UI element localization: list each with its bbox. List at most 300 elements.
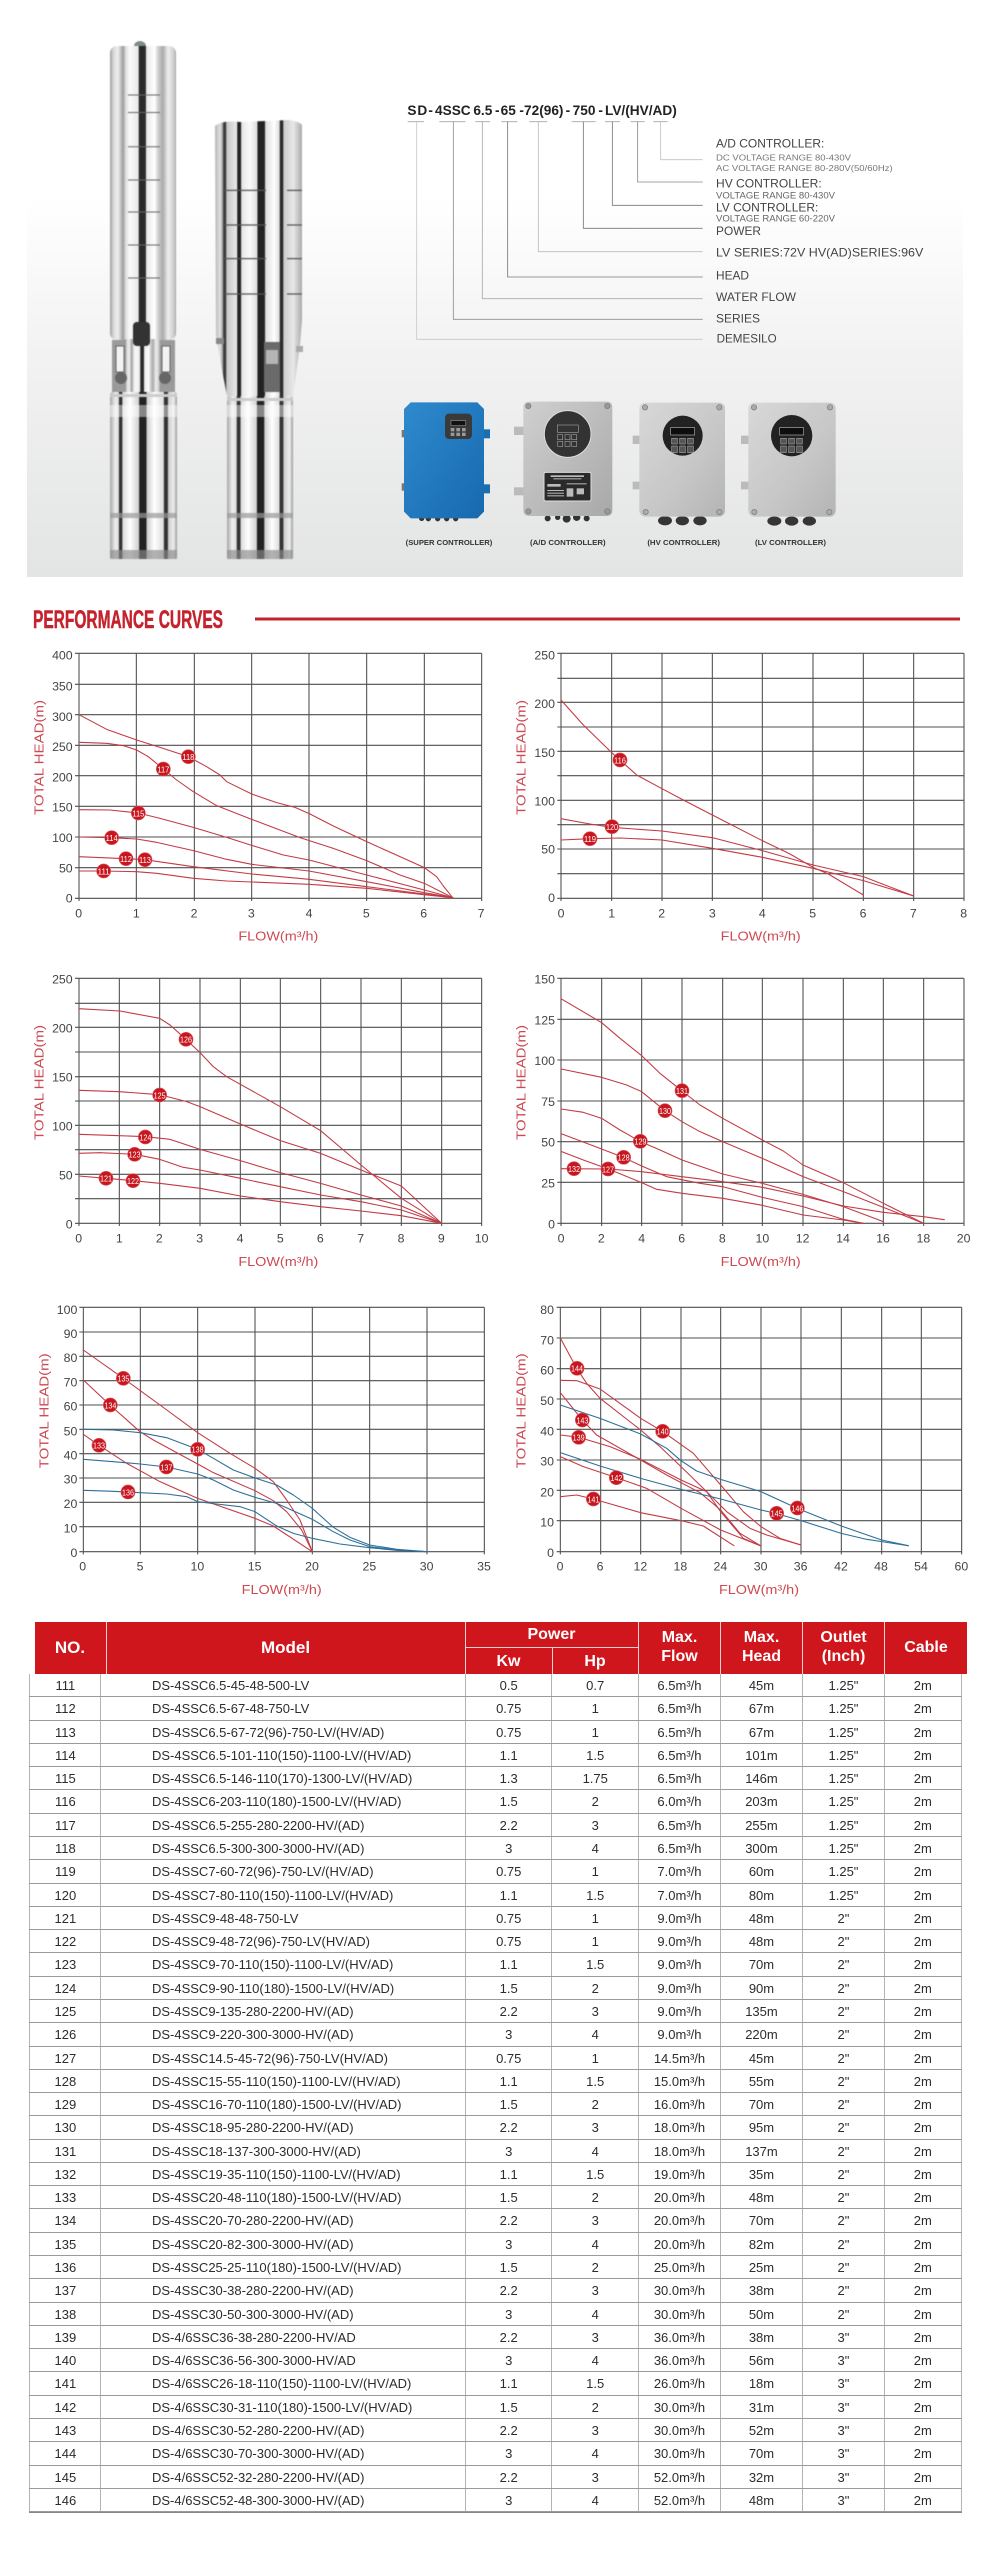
row 131: 137m bbox=[745, 2144, 778, 2159]
row 115: 6.5m³/h bbox=[657, 1771, 702, 1786]
chart: models 116, 119, 120: 8 bbox=[960, 906, 967, 920]
row 143: 2m bbox=[914, 2423, 932, 2438]
chart: models 139-146: 10 bbox=[540, 1516, 554, 1530]
chart: models 121-126: 7 bbox=[357, 1232, 364, 1246]
row 122: 122 bbox=[54, 1934, 76, 1949]
row 132: 35m bbox=[749, 2167, 774, 2182]
chart: models 139-146: 30 bbox=[540, 1455, 554, 1469]
row 136 bbox=[29, 2256, 962, 2279]
row 131: 18.0m³/h bbox=[654, 2144, 705, 2159]
row 135: 82m bbox=[749, 2237, 774, 2252]
model code string: 4SSC bbox=[435, 103, 471, 118]
chart: models 127-132: 127 bbox=[602, 1164, 614, 1174]
row 133 bbox=[29, 2186, 962, 2209]
row 115 bbox=[29, 1767, 962, 1790]
row 129: 2 bbox=[592, 2097, 599, 2112]
row 144: 144 bbox=[54, 2446, 76, 2461]
row 121: 48m bbox=[749, 1911, 774, 1926]
row 128: 2" bbox=[838, 2074, 849, 2089]
chart: models 121-126: 150 bbox=[52, 1071, 73, 1085]
legend labels: WATER FLOW bbox=[716, 290, 797, 304]
model code string: 6.5 bbox=[473, 103, 493, 118]
row 119: 2m bbox=[914, 1864, 932, 1879]
row 115: 2m bbox=[914, 1771, 932, 1786]
row 127: 2" bbox=[838, 2050, 849, 2066]
row 122 bbox=[29, 1930, 962, 1953]
row 112: 1.25" bbox=[828, 1701, 858, 1716]
row 140: 56m bbox=[749, 2353, 774, 2368]
row 141: 1.1 bbox=[500, 2376, 518, 2391]
row 113: 67m bbox=[749, 1725, 774, 1740]
chart: models 111-115, 117, 118: 117 bbox=[157, 764, 169, 774]
row 115: 115 bbox=[55, 1771, 76, 1786]
chart: models 127-132: 150 bbox=[534, 972, 555, 986]
row 111 bbox=[29, 1674, 962, 1697]
chart: models 139-146: 54 bbox=[914, 1560, 928, 1574]
chart: models 127-132: 130 bbox=[659, 1106, 671, 1116]
row 120: 2m bbox=[914, 1888, 932, 1903]
legend labels: VOLTAGE RANGE 60-220V bbox=[716, 214, 835, 224]
row 137: 2" bbox=[838, 2283, 849, 2298]
model code string: 65 bbox=[501, 103, 516, 118]
row 129: 2m bbox=[914, 2097, 932, 2112]
row 130: 2.2 bbox=[500, 2120, 518, 2135]
chart: models 139-146: 60 bbox=[954, 1560, 968, 1574]
row 120: DS-4SSC7-80-110(150)-1100-LV/(HV/AD) bbox=[152, 1888, 393, 1903]
row 112: 1 bbox=[592, 1701, 599, 1716]
row 132: DS-4SSC19-35-110(150)-1100-LV/(HV/AD) bbox=[152, 2167, 401, 2182]
row 121: 2m bbox=[914, 1911, 932, 1926]
chart: models 139-146: 139 bbox=[573, 1433, 585, 1443]
row 124: 2m bbox=[914, 1981, 932, 1996]
row 138: DS-4SSC30-50-300-3000-HV/(AD) bbox=[152, 2307, 354, 2322]
row 123: 9.0m³/h bbox=[657, 1957, 702, 1972]
chart: models 139-146: TOTAL HEAD(m) bbox=[514, 1353, 529, 1468]
row 135: 20.0m³/h bbox=[654, 2237, 705, 2252]
chart: models 116, 119, 120: 3 bbox=[709, 906, 716, 920]
row 124 bbox=[29, 1977, 962, 2000]
chart: models 127-132: 25 bbox=[541, 1176, 555, 1190]
chart: models 116, 119, 120: 100 bbox=[534, 794, 555, 808]
row 118: 3 bbox=[505, 1841, 512, 1856]
chart: models 139-146: 142 bbox=[610, 1473, 622, 1483]
chart: models 111-115, 117, 118: 115 bbox=[132, 808, 144, 818]
row 123: 1.5 bbox=[586, 1957, 604, 1972]
row 116: 6.0m³/h bbox=[657, 1794, 702, 1809]
row 138: 3 bbox=[505, 2307, 512, 2322]
row 141: 141 bbox=[54, 2376, 76, 2391]
legend labels: AC VOLTAGE RANGE 80-280V(50/60Hz) bbox=[716, 163, 893, 173]
pump 2 bbox=[215, 120, 303, 559]
row 142: 31m bbox=[749, 2400, 774, 2415]
chart: models 139-146: 140 bbox=[657, 1427, 669, 1437]
chart: models 111-115, 117, 118: 300 bbox=[52, 710, 73, 724]
table header bbox=[35, 1622, 967, 1674]
row 141: 26.0m³/h bbox=[654, 2376, 705, 2391]
row 130: 3 bbox=[592, 2120, 599, 2135]
chart: models 121-126: 121 bbox=[100, 1174, 112, 1184]
row 119: DS-4SSC7-60-72(96)-750-LV/(HV/AD) bbox=[152, 1864, 374, 1879]
row 144: 70m bbox=[749, 2446, 774, 2461]
chart: models 139-146: 141 bbox=[587, 1494, 599, 1504]
row 129: DS-4SSC16-70-110(180)-1500-LV/(HV/AD) bbox=[152, 2097, 401, 2112]
row 121 bbox=[29, 1907, 962, 1930]
chart: models 139-146: 20 bbox=[540, 1485, 554, 1499]
row 144: 30.0m³/h bbox=[654, 2446, 705, 2461]
chart: models 133-138: 10 bbox=[64, 1521, 77, 1535]
row 135 bbox=[29, 2233, 962, 2256]
row 122: 2m bbox=[914, 1934, 932, 1949]
chart: models 139-146: 48 bbox=[874, 1560, 888, 1574]
row 132: 1.1 bbox=[500, 2167, 518, 2182]
row 133: 2 bbox=[592, 2190, 599, 2205]
row 121: 1 bbox=[592, 1911, 599, 1926]
row 111: 0.7 bbox=[586, 1678, 604, 1693]
row 122: 48m bbox=[749, 1934, 774, 1949]
chart: models 133-138: 5 bbox=[137, 1560, 144, 1574]
chart: models 121-126: 9 bbox=[438, 1232, 445, 1246]
code underlines and leader lines bbox=[408, 122, 703, 339]
chart: models 127-132: 18 bbox=[916, 1232, 930, 1246]
row 137: 3 bbox=[592, 2283, 599, 2298]
row 139 bbox=[29, 2326, 962, 2349]
row 126: 220m bbox=[745, 2027, 778, 2042]
row 128: 128 bbox=[54, 2074, 76, 2089]
chart: models 111-115, 117, 118: 3 bbox=[248, 906, 255, 920]
row 133: 20.0m³/h bbox=[654, 2190, 705, 2205]
row 119: 1.25" bbox=[828, 1864, 858, 1879]
chart: models 133-138: 35 bbox=[477, 1560, 491, 1574]
controller: super bbox=[402, 402, 490, 521]
section heading: performance curves bbox=[33, 606, 960, 634]
row 126: 2" bbox=[838, 2027, 849, 2042]
row 131 bbox=[29, 2140, 962, 2163]
chart: models 127-132: 129 bbox=[634, 1137, 646, 1147]
row 146: 146 bbox=[54, 2493, 76, 2508]
chart: models 133-138: FLOW(m³/h) bbox=[242, 1582, 322, 1597]
row 125: 125 bbox=[54, 2004, 76, 2019]
chart: models 133-138: 20 bbox=[305, 1560, 319, 1574]
legend labels: A/D CONTROLLER: bbox=[716, 137, 824, 151]
chart: models 133-138: 0 bbox=[79, 1560, 86, 1574]
chart: models 111-115, 117, 118: 0 bbox=[75, 906, 82, 920]
row 115: 1.75 bbox=[583, 1771, 608, 1786]
row 112: DS-4SSC6.5-67-48-750-LV bbox=[152, 1701, 309, 1716]
chart: models 127-132: 12 bbox=[796, 1232, 810, 1246]
chart: models 127-132: 2 bbox=[598, 1232, 605, 1246]
chart: models 133-138: 50 bbox=[64, 1424, 77, 1438]
row 131: 131 bbox=[54, 2144, 76, 2159]
chart: models 127-132: 10 bbox=[755, 1232, 769, 1246]
model code diagram bbox=[407, 103, 924, 345]
row 120: 1.1 bbox=[500, 1888, 518, 1903]
chart: models 116, 119, 120: 250 bbox=[534, 649, 555, 663]
row 114: 114 bbox=[55, 1748, 76, 1763]
row 119: 1 bbox=[592, 1864, 599, 1879]
chart: models 111-115, 117, 118: 200 bbox=[52, 771, 73, 785]
chart: models 121-126: 200 bbox=[52, 1021, 73, 1035]
chart: models 127-132: 14 bbox=[836, 1232, 850, 1246]
chart: models 116, 119, 120: 120 bbox=[606, 822, 618, 832]
row 125: 135m bbox=[745, 2004, 778, 2019]
row 134: DS-4SSC20-70-280-2200-HV/(AD) bbox=[152, 2213, 354, 2228]
row 125: DS-4SSC9-135-280-2200-HV/(AD) bbox=[152, 2004, 354, 2019]
chart: models 116, 119, 120: 6 bbox=[860, 906, 867, 920]
row 137: 2.2 bbox=[500, 2283, 518, 2298]
illustration: two stainless steel pumps bbox=[110, 40, 304, 560]
chart: models 133-138: 25 bbox=[362, 1560, 376, 1574]
row 134: 2" bbox=[838, 2213, 849, 2228]
row 122: 2" bbox=[838, 1934, 849, 1949]
row 116: 116 bbox=[55, 1794, 76, 1809]
row 146: 52.0m³/h bbox=[654, 2493, 705, 2508]
chart: models 133-138: 138 bbox=[192, 1445, 204, 1455]
row 114: DS-4SSC6.5-101-110(150)-1100-LV/(HV/AD) bbox=[152, 1748, 411, 1763]
row 125: 9.0m³/h bbox=[657, 2004, 702, 2019]
row 123: 70m bbox=[749, 1957, 774, 1972]
row 140: 3" bbox=[838, 2353, 849, 2368]
row 145: 32m bbox=[749, 2470, 774, 2485]
chart: models 133-138: 90 bbox=[64, 1327, 77, 1341]
row 142: 3" bbox=[838, 2400, 849, 2415]
row 143: DS-4/6SSC30-52-280-2200-HV/(AD) bbox=[152, 2423, 364, 2438]
row 141: 2m bbox=[914, 2376, 932, 2391]
chart: models 111-115, 117, 118: 350 bbox=[52, 680, 73, 694]
row 140: 4 bbox=[592, 2353, 599, 2368]
row 124: 9.0m³/h bbox=[657, 1981, 702, 1996]
row 141: 3" bbox=[838, 2376, 849, 2391]
chart: models 121-126: 1 bbox=[116, 1232, 123, 1246]
model code string: - bbox=[519, 103, 524, 118]
row 144 bbox=[29, 2442, 962, 2466]
row 143: 2.2 bbox=[500, 2423, 518, 2438]
chart: models 121-126: TOTAL HEAD(m) bbox=[32, 1025, 47, 1140]
chart: models 139-146: FLOW(m³/h) bbox=[719, 1582, 799, 1597]
chart: models 111-115, 117, 118: FLOW(m³/h) bbox=[238, 928, 318, 943]
row 111: 45m bbox=[749, 1678, 774, 1693]
row 125: 2m bbox=[914, 2004, 932, 2019]
row 137: 137 bbox=[54, 2283, 76, 2298]
chart: models 116, 119, 120: 119 bbox=[584, 834, 596, 844]
row 111: 6.5m³/h bbox=[657, 1678, 702, 1693]
row 129 bbox=[29, 2093, 962, 2116]
chart: models 139-146: 0 bbox=[557, 1560, 564, 1574]
row 146: 3 bbox=[505, 2493, 512, 2508]
row 111: 1.25" bbox=[828, 1678, 858, 1693]
legend labels: LV CONTROLLER: bbox=[716, 200, 818, 214]
row 126: 126 bbox=[54, 2027, 76, 2042]
row 117 bbox=[29, 1814, 962, 1837]
chart: models 121-126: 3 bbox=[196, 1232, 203, 1246]
chart: models 139-146: 12 bbox=[633, 1560, 647, 1574]
chart: models 139-146: 145 bbox=[771, 1509, 783, 1519]
row 126 bbox=[29, 2023, 962, 2046]
legend labels: HEAD bbox=[716, 268, 749, 282]
row 137: 30.0m³/h bbox=[654, 2283, 705, 2298]
row 117: 117 bbox=[55, 1818, 76, 1833]
row 124: 2" bbox=[838, 1981, 849, 1996]
model code string: S bbox=[407, 103, 416, 118]
chart: models 111-115, 117, 118: 111 bbox=[98, 866, 110, 876]
row 132: 2" bbox=[838, 2167, 849, 2182]
section heading: performance curves: PERFORMANCE CURVES bbox=[33, 606, 223, 634]
chart: models 139-146: 143 bbox=[576, 1415, 588, 1425]
legend labels: DC VOLTAGE RANGE 80-430V bbox=[716, 152, 851, 162]
row 118: 118 bbox=[55, 1841, 76, 1856]
row 142: 2m bbox=[914, 2400, 932, 2415]
row 116: 1.5 bbox=[500, 1794, 518, 1809]
chart: models 133-138: 60 bbox=[64, 1400, 77, 1414]
row 111: 0.5 bbox=[500, 1678, 518, 1693]
chart: models 111-115, 117, 118: 50 bbox=[59, 861, 73, 875]
row 129: 1.5 bbox=[500, 2097, 518, 2112]
chart: models 127-132 bbox=[514, 972, 971, 1269]
chart: models 139-146: 30 bbox=[754, 1560, 768, 1574]
row 139: 139 bbox=[54, 2330, 76, 2345]
row 142: 2 bbox=[592, 2400, 599, 2415]
legend labels: HV CONTROLLER: bbox=[716, 177, 822, 191]
row 139: 36.0m³/h bbox=[654, 2330, 705, 2345]
chart: models 121-126: 50 bbox=[59, 1168, 73, 1182]
row 122: 0.75 bbox=[496, 1934, 521, 1949]
chart: models 121-126: 100 bbox=[52, 1119, 73, 1133]
row 128: 2m bbox=[914, 2074, 932, 2089]
row 129: 129 bbox=[54, 2097, 76, 2112]
model code string: 750 bbox=[573, 103, 596, 118]
chart: models 111-115, 117, 118: 118 bbox=[182, 752, 194, 762]
chart: models 139-146: 0 bbox=[547, 1546, 554, 1560]
row 114: 1.1 bbox=[500, 1748, 518, 1763]
legend labels: DEMESILO bbox=[717, 331, 777, 345]
chart: models 121-126: 0 bbox=[66, 1217, 73, 1231]
row 118: DS-4SSC6.5-300-300-3000-HV/(AD) bbox=[152, 1841, 364, 1856]
row 133: 1.5 bbox=[500, 2190, 518, 2205]
row 133: DS-4SSC20-48-110(180)-1500-LV/(HV/AD) bbox=[152, 2190, 401, 2205]
row 126: 4 bbox=[592, 2027, 599, 2042]
row 138: 50m bbox=[749, 2307, 774, 2322]
row 141: DS-4/6SSC26-18-110(150)-1100-LV/(HV/AD) bbox=[152, 2376, 411, 2391]
chart: models 139-146: 36 bbox=[794, 1560, 808, 1574]
table header: Flow bbox=[661, 1648, 698, 1665]
row 111: 111 bbox=[55, 1678, 75, 1693]
row 120: 1.5 bbox=[586, 1888, 604, 1903]
chart: models 121-126: 8 bbox=[398, 1232, 405, 1246]
chart: models 121-126: 10 bbox=[475, 1232, 489, 1246]
chart: models 127-132: 20 bbox=[957, 1232, 971, 1246]
table header: Head bbox=[742, 1648, 781, 1665]
row 142 bbox=[29, 2396, 962, 2419]
row 138: 30.0m³/h bbox=[654, 2307, 705, 2322]
row 131: 2" bbox=[838, 2144, 849, 2159]
row 143: 3 bbox=[592, 2423, 599, 2438]
row 114: 6.5m³/h bbox=[657, 1748, 702, 1763]
row 136: 1.5 bbox=[500, 2260, 518, 2275]
row 134: 2m bbox=[914, 2213, 932, 2228]
table header: Max. bbox=[744, 1629, 779, 1646]
row 117: 2.2 bbox=[500, 1818, 518, 1833]
row 131: 3 bbox=[505, 2144, 512, 2159]
row 125: 3 bbox=[592, 2004, 599, 2019]
row 124: 124 bbox=[54, 1981, 76, 1996]
chart: models 116, 119, 120: 150 bbox=[534, 746, 555, 760]
row 132 bbox=[29, 2163, 962, 2186]
legend labels: VOLTAGE RANGE 80-430V bbox=[716, 190, 835, 200]
model code string: - bbox=[566, 103, 570, 118]
chart: models 121-126: 124 bbox=[139, 1132, 151, 1142]
row 117: 2m bbox=[914, 1818, 932, 1833]
row 118 bbox=[29, 1837, 962, 1860]
chart: models 121-126: 126 bbox=[180, 1035, 192, 1045]
row 140: 3 bbox=[505, 2353, 512, 2368]
row 141: 18m bbox=[749, 2376, 774, 2391]
row 144: 3 bbox=[505, 2446, 512, 2461]
model code string: - bbox=[598, 103, 603, 118]
chart: models 133-138 bbox=[36, 1303, 491, 1597]
row 138: 4 bbox=[592, 2307, 599, 2322]
row 116: 2m bbox=[914, 1794, 932, 1809]
row 112: 67m bbox=[749, 1701, 774, 1716]
row 123: 2m bbox=[914, 1957, 932, 1972]
row 145: 3" bbox=[838, 2470, 849, 2485]
row 136: 25.0m³/h bbox=[654, 2260, 705, 2275]
chart: models 133-138: 0 bbox=[70, 1546, 77, 1560]
row 130: 2m bbox=[914, 2120, 932, 2135]
row 136: 136 bbox=[54, 2260, 76, 2275]
model code string: LV/(HV/AD) bbox=[605, 103, 677, 118]
row 119: 7.0m³/h bbox=[657, 1864, 702, 1879]
chart: models 139-146: 50 bbox=[540, 1394, 554, 1408]
row 145: 2m bbox=[914, 2470, 932, 2485]
row 115: 1.3 bbox=[500, 1771, 518, 1786]
chart: models 121-126: 123 bbox=[129, 1150, 141, 1160]
chart: models 116, 119, 120: 116 bbox=[614, 755, 626, 765]
row 118: 6.5m³/h bbox=[657, 1841, 702, 1856]
row 118: 1.25" bbox=[828, 1841, 858, 1856]
row 136: DS-4SSC25-25-110(180)-1500-LV/(HV/AD) bbox=[152, 2260, 401, 2275]
chart: models 127-132: TOTAL HEAD(m) bbox=[514, 1025, 529, 1140]
chart: models 116, 119, 120: 200 bbox=[534, 697, 555, 711]
controller captions: (A/D CONTROLLER) bbox=[530, 538, 606, 547]
row 118: 300m bbox=[745, 1841, 778, 1856]
row 136: 2" bbox=[838, 2260, 849, 2275]
row 111: DS-4SSC6.5-45-48-500-LV bbox=[152, 1678, 309, 1693]
row 129: 70m bbox=[749, 2097, 774, 2112]
chart: models 111-115, 117, 118: 6 bbox=[420, 906, 427, 920]
chart: models 139-146: 6 bbox=[597, 1560, 604, 1574]
row 136: 2 bbox=[592, 2260, 599, 2275]
chart: models 116, 119, 120: 0 bbox=[548, 891, 555, 905]
row 146: 2m bbox=[914, 2493, 932, 2508]
row 131: 2m bbox=[914, 2144, 932, 2159]
row 140: 2m bbox=[914, 2353, 932, 2368]
row 135: 3 bbox=[505, 2237, 512, 2252]
row 135: 4 bbox=[592, 2237, 599, 2252]
row 121: DS-4SSC9-48-48-750-LV bbox=[152, 1911, 298, 1926]
row 135: 2" bbox=[838, 2237, 849, 2252]
chart: models 111-115, 117, 118: 5 bbox=[363, 906, 370, 920]
row 133: 133 bbox=[54, 2190, 76, 2205]
row 113: DS-4SSC6.5-67-72(96)-750-LV/(HV/AD) bbox=[152, 1725, 384, 1740]
legend labels: LV SERIES:72V HV(AD)SERIES:96V bbox=[716, 246, 923, 260]
row 114: 101m bbox=[745, 1748, 778, 1763]
row 130: 2" bbox=[838, 2120, 849, 2135]
chart: models 133-138: 20 bbox=[64, 1497, 77, 1511]
chart: models 139-146: 18 bbox=[673, 1560, 687, 1574]
row 125 bbox=[29, 2000, 962, 2023]
row 121: 121 bbox=[54, 1911, 76, 1926]
row 132: 1.5 bbox=[586, 2167, 604, 2182]
controller captions: (HV CONTROLLER) bbox=[647, 538, 721, 547]
